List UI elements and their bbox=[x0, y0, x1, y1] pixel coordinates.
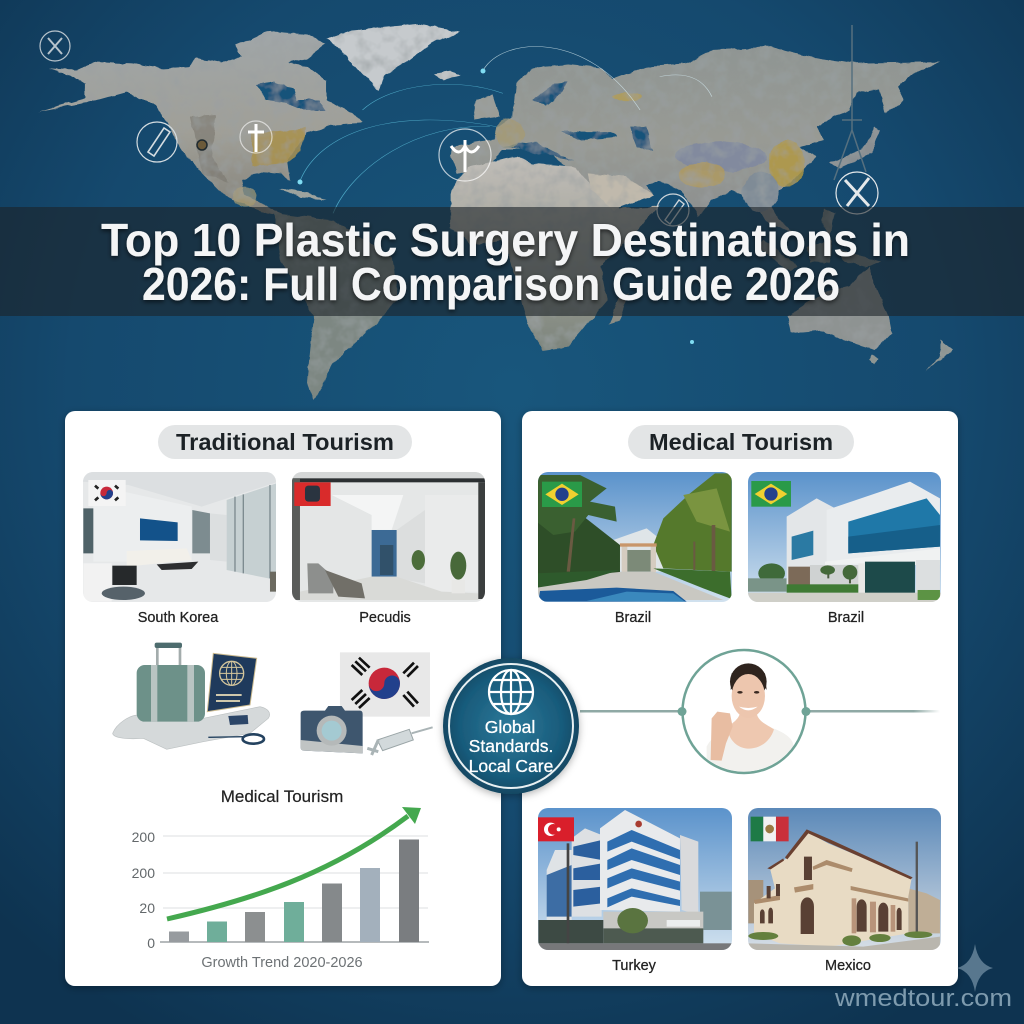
chart title: Medical Tourism bbox=[221, 787, 343, 806]
icon: pencil badge bbox=[137, 122, 177, 162]
title bbox=[101, 214, 910, 310]
icon: caduceus badge bbox=[439, 129, 491, 181]
flag: South Korea large bbox=[340, 652, 430, 717]
chart caption: Growth Trend 2020-2026 bbox=[201, 955, 363, 971]
chart y axis labels: 20 bbox=[139, 900, 155, 916]
panel: traditional tourism bbox=[65, 411, 501, 986]
icon: suitcase and passport bbox=[113, 643, 270, 749]
icon: camera, flag and syringe bbox=[301, 652, 433, 755]
icon: cross-tools top left bbox=[40, 31, 70, 61]
map: Caribbean bbox=[280, 188, 327, 200]
icon: crossed tools right bbox=[836, 172, 878, 214]
badge text bbox=[469, 717, 553, 776]
photo: Turkey hospital bbox=[537, 807, 733, 952]
heading pill: medical tourism bbox=[628, 425, 854, 459]
title band bbox=[0, 207, 1024, 316]
route arcs and map icons bbox=[40, 25, 878, 344]
heading pill: traditional tourism bbox=[158, 425, 412, 459]
map: India lights bbox=[679, 162, 725, 188]
panel: medical tourism bbox=[522, 411, 958, 986]
chart y axis labels: 0 bbox=[147, 935, 155, 951]
badge text: Global bbox=[485, 717, 535, 737]
label: Turkey: Turkey bbox=[612, 958, 657, 974]
icon: marker dot bbox=[197, 140, 207, 150]
badge text: Standards. bbox=[469, 736, 553, 756]
map: Africa bbox=[451, 157, 660, 350]
map: Hudson Bay bbox=[256, 82, 327, 110]
connector nodes bbox=[678, 707, 810, 716]
chart trend arrow bbox=[167, 807, 421, 919]
map: UK bbox=[473, 95, 500, 120]
flag: Turkey bbox=[537, 817, 574, 841]
label: Mexico: Mexico bbox=[825, 958, 871, 974]
map: Iceland bbox=[434, 71, 460, 79]
map: US city lights bbox=[251, 128, 307, 167]
map: Eurasia bbox=[451, 47, 940, 233]
title: Top 10 Plastic Surgery Destinations in bbox=[101, 214, 910, 266]
chart: medical tourism growth bbox=[132, 787, 429, 971]
label: Brazil: Brazil bbox=[828, 610, 864, 626]
chart y axis labels: 200 bbox=[132, 865, 155, 881]
shrubs bbox=[748, 931, 932, 946]
photo: South Korea clinic bbox=[82, 472, 278, 603]
badge: global standards bbox=[443, 658, 579, 794]
map: Arabia bbox=[588, 173, 653, 210]
chart y axis labels: 200 bbox=[132, 829, 155, 845]
map: Europe lights bbox=[495, 118, 524, 148]
label: Pecudis: Pecudis bbox=[359, 610, 411, 626]
icon: route glow dots bbox=[298, 68, 694, 344]
photo: Brazil clinic bbox=[747, 472, 943, 603]
flag: Brazil bbox=[751, 481, 791, 507]
label: Brazil: Brazil bbox=[615, 610, 651, 626]
map: Indochina bbox=[743, 172, 779, 212]
chart y axis labels bbox=[132, 829, 155, 951]
map: Australia bbox=[787, 267, 891, 350]
map: North America bbox=[39, 32, 362, 217]
heading pill: medical tourism: Medical Tourism bbox=[649, 429, 833, 455]
map: SE Asia islands bbox=[758, 208, 882, 272]
photo: Mexico hacienda bbox=[747, 807, 943, 952]
map: China lights bbox=[769, 140, 805, 187]
icon: globe bbox=[489, 670, 533, 714]
icon: tower bbox=[834, 25, 866, 180]
badge text: Local Care bbox=[469, 756, 553, 776]
icon: cross badge bbox=[240, 121, 272, 153]
chart bars bbox=[169, 840, 419, 942]
route: Atlantic arcs bbox=[300, 47, 712, 213]
photo: face circle with connector bbox=[580, 650, 940, 773]
map: Russia lights bbox=[613, 93, 641, 101]
heading pill: traditional tourism: Traditional Tourism bbox=[176, 429, 394, 455]
map: Tasmania and New Zealand bbox=[869, 340, 954, 372]
world map bbox=[39, 23, 954, 400]
flag: Brazil bbox=[542, 482, 582, 507]
map: Mexico lights bbox=[233, 187, 257, 207]
map: Tibet plateau bbox=[676, 142, 767, 172]
map: Madagascar bbox=[609, 293, 628, 325]
flag: red square bbox=[294, 482, 331, 506]
map: western US bbox=[189, 115, 229, 183]
photo: Brazil resort bbox=[537, 472, 733, 603]
map: Greenland bbox=[327, 23, 460, 90]
icon: syringe badge bbox=[657, 194, 689, 226]
map: Japan bbox=[829, 127, 880, 168]
label: South Korea: South Korea bbox=[138, 610, 219, 626]
flag: Mexico bbox=[751, 817, 789, 841]
map: South America bbox=[274, 213, 398, 400]
watermark: wmedtour.com bbox=[834, 985, 1012, 1012]
map: inland seas bbox=[503, 82, 653, 160]
title: 2026: Full Comparison Guide 2026 bbox=[142, 258, 840, 310]
photo: Pecudis clinic bbox=[292, 472, 487, 603]
watermark bbox=[834, 944, 1012, 1012]
flag: South Korea bbox=[88, 480, 126, 506]
